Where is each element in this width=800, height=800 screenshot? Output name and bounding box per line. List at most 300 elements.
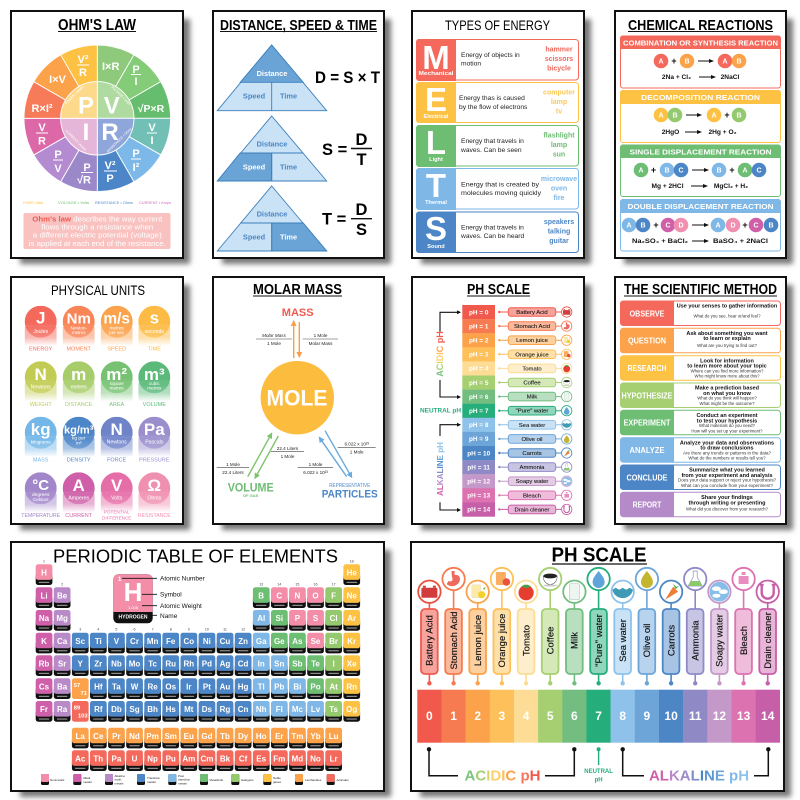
- elements: actinides: Bk: [220, 754, 231, 763]
- step: analyze: ANALYZE: [630, 445, 665, 455]
- elements: period 7: Bh: [147, 705, 158, 714]
- connectors, labels and icons: Sea water: [519, 423, 545, 429]
- row: light: Light: [429, 157, 443, 163]
- unit: potential difference: V: [111, 476, 123, 495]
- unit: moment: Newton-: [71, 326, 87, 330]
- item: drain cleaner: [756, 580, 779, 686]
- legend: element categories: Lanthanides: [305, 778, 322, 782]
- step: experiment: to test your hypothesis: [697, 418, 757, 424]
- elements: period 7: Ts: [329, 705, 339, 714]
- elements: lanthanides: Yb: [310, 732, 321, 741]
- step: experiment: EXPERIMENT: [624, 418, 671, 428]
- reaction: decomposition: A: [658, 112, 664, 120]
- elements: period 4: Ge: [274, 637, 285, 646]
- reaction: double displacement: DOUBLE DISPLACEMENT REACTION: [628, 204, 774, 211]
- connectors, labels and icons: Olive oil: [522, 437, 542, 443]
- elements: lanthanides: La: [76, 732, 85, 741]
- row: sound: Energy that travels in: [461, 224, 524, 232]
- pH column: pH = 8: [469, 422, 489, 429]
- step: hypothesize: on what you know: [703, 391, 752, 397]
- item: olive oil: [636, 568, 658, 686]
- item: stomach acid: Stomach Acid: [449, 611, 460, 670]
- row: light: [416, 124, 578, 167]
- reaction: decomposition: B: [736, 112, 742, 120]
- triangle: distance highlighted: [217, 45, 327, 111]
- elements: period 5: In: [258, 659, 265, 668]
- elements: actinides: Am: [182, 754, 195, 763]
- chart: formula wheel: R: [38, 136, 46, 148]
- connectors, labels and icons: Drain cleaner: [514, 507, 550, 513]
- elements: period 4: Ga: [256, 637, 267, 646]
- elements: period 6: At: [329, 682, 338, 691]
- elements: period 7: Nh: [256, 705, 267, 714]
- item: sea water: Sea water: [618, 619, 629, 662]
- elements: period 5: Zr: [94, 659, 102, 668]
- step: report: through writing or presenting: [688, 500, 766, 506]
- elements: period 5: Xe: [347, 659, 357, 668]
- unit: time: [138, 306, 170, 353]
- fraction: mole per particles: [298, 462, 333, 475]
- chart: formula wheel: VOLTAGE • Volts: [110, 85, 132, 106]
- elements: period 7: Hs: [166, 705, 176, 714]
- callout: definition: flows through a resistance when: [41, 222, 153, 232]
- fraction: mole per molar mass: 1 Mole: [314, 333, 328, 338]
- legend: element categories: transition: [178, 778, 191, 782]
- fraction: mole per molar mass: [303, 333, 338, 346]
- pH colour bar: 14: [761, 709, 775, 723]
- reaction: combination or synthesis: 2NaCl: [721, 74, 740, 81]
- bracket: alkaline pH: ALKALINE pH: [649, 768, 749, 784]
- row: mechanical: hammer: [545, 46, 573, 54]
- circle: mole: MOLE: [266, 386, 328, 410]
- chart: formula wheel: V: [54, 163, 62, 175]
- arrows: gas volume and mole: [248, 433, 278, 478]
- elements: period 5: Sn: [274, 659, 285, 668]
- reaction: single displacement: B: [716, 168, 722, 174]
- step: experiment: What materials do you need?: [699, 423, 756, 428]
- pH column: pH = 0: [469, 309, 489, 316]
- elements: period 4: Mn: [147, 637, 158, 646]
- elements: period 6: Tl: [258, 682, 265, 691]
- row: sound: [416, 210, 578, 253]
- elements: period 4: Br: [329, 637, 338, 646]
- step: conclude: Does your data support or reject your hypothesis?: [678, 478, 777, 483]
- pH column: pH = 10: [467, 450, 491, 457]
- elements: period 5: Sb: [292, 659, 303, 668]
- unit: weight: WEIGHT: [30, 402, 52, 408]
- reaction: single displacement: A: [742, 168, 748, 174]
- unit: pressure: Pascals: [145, 440, 164, 446]
- reaction: combination or synthesis: A: [658, 58, 664, 66]
- elements: period 5: Ru: [165, 659, 176, 668]
- reaction: combination or synthesis: A: [722, 58, 728, 66]
- unit: pressure: Pa: [144, 420, 165, 439]
- elements: period 2: Li: [40, 591, 48, 600]
- unit: force: [101, 417, 133, 464]
- legend: element categories: Alkaline: [114, 774, 125, 778]
- step: hypothesize: [620, 383, 780, 408]
- elements: period 2: Ne: [347, 591, 357, 600]
- elements: period 3: P: [295, 614, 301, 623]
- column numbers: 3: [79, 628, 81, 632]
- row: sound: speakers: [544, 219, 574, 226]
- elements: period 6: Hf: [94, 682, 103, 691]
- reaction: single displacement: B: [664, 168, 670, 174]
- row: electrical: tv: [556, 108, 562, 116]
- reaction: double displacement: D: [730, 222, 736, 230]
- reaction: single displacement: [620, 144, 781, 196]
- unit: time: s: [150, 308, 159, 328]
- elements: period 5: Y: [78, 659, 84, 668]
- elements: period 6: Cs: [39, 682, 50, 691]
- legend: VOLTAGE • Volts: [58, 201, 89, 205]
- reaction: double displacement: B: [768, 222, 774, 230]
- item: milk: Milk: [570, 632, 581, 649]
- unit: temperature: TEMPERATURE: [21, 513, 61, 519]
- elements: actinides: No: [310, 754, 321, 763]
- unit: moment: Nm: [67, 310, 91, 328]
- step: experiment: Conduct an experiment: [696, 413, 758, 419]
- step: research: to learn more about your topic: [687, 364, 767, 370]
- elements: period 6: 71: [80, 691, 88, 697]
- chart: formula wheel: R: [79, 67, 87, 79]
- fraction: mole per liters: [217, 462, 249, 475]
- heading: pH scale: PH SCALE: [552, 545, 646, 567]
- unit: resistance: RESISTANCE: [138, 513, 171, 519]
- pH colour bar: 6: [571, 709, 578, 723]
- unit: current: CURRENT: [65, 513, 93, 519]
- connectors, labels and icons: [498, 307, 572, 515]
- row: mechanical: [416, 39, 578, 81]
- legend: element categories: Post: [178, 774, 184, 778]
- reaction: double displacement: A: [715, 222, 721, 230]
- unit: speed: metres: [110, 326, 124, 330]
- elements: actinides: Pu: [166, 754, 176, 763]
- key: hydrogen sample cell: Name: [160, 613, 178, 620]
- bracket: acidic: ACIDIC pH: [435, 331, 445, 377]
- reaction: double displacement: B: [640, 222, 646, 230]
- row: mechanical: scissors: [545, 56, 573, 63]
- legend: element categories: metals: [114, 781, 124, 785]
- chart: formula wheel: I²: [133, 162, 140, 174]
- reaction: single displacement: MgCl₂ + H₂: [714, 183, 748, 190]
- triangle: speed highlighted: Speed: [243, 162, 266, 172]
- circle: mole: [261, 361, 334, 434]
- pH colour bar: 5: [547, 709, 554, 723]
- reaction: combination or synthesis: COMBINATION OR SYNTHESIS REACTION: [623, 40, 778, 48]
- unit: force: FORCE: [107, 458, 127, 464]
- arrows: mass and mole: [294, 321, 299, 358]
- key: hydrogen sample cell: 1: [118, 577, 122, 583]
- reaction: double displacement: BaSO₄ + 2NaCl: [713, 238, 768, 245]
- elements: period 4: [36, 633, 360, 653]
- unit: volume: [138, 361, 170, 408]
- chart: formula wheel: I×R: [102, 61, 119, 73]
- fraction: liters per mole: [271, 446, 304, 459]
- arrows: particles and mole: [319, 431, 352, 477]
- pH colour bar: 10: [664, 709, 678, 723]
- item: carrots: Carrots: [666, 625, 677, 656]
- step: analyze: [620, 437, 780, 462]
- chart: formula wheel: CURRENT • Amps: [64, 129, 87, 152]
- unit: resistance: Ω: [147, 476, 161, 495]
- elements: period 6: W: [131, 682, 139, 691]
- item: orange juice: Orange juice: [497, 614, 508, 667]
- heading: molar mass: MOLAR MASS: [253, 281, 342, 298]
- chart: formula wheel: [24, 45, 171, 192]
- unit: force: N: [111, 420, 123, 439]
- unit: potential difference: [101, 472, 133, 520]
- formula: time: T =: [322, 210, 346, 228]
- legend: element categories: Metalloids: [210, 778, 224, 782]
- reaction: decomposition: B: [672, 112, 678, 120]
- elements: period 5: Mo: [129, 659, 140, 668]
- elements: period 4: Ti: [95, 637, 102, 646]
- row: thermal: oven: [551, 186, 567, 192]
- column numbers: 6: [134, 628, 136, 632]
- row: sound: guitar: [549, 238, 569, 245]
- row: electrical: by the flow of electrons: [459, 104, 528, 111]
- elements: period 1: [36, 564, 360, 585]
- reaction: decomposition: DECOMPOSITION REACTION: [641, 95, 760, 102]
- item: lemon juice: Lemon juice: [473, 615, 484, 666]
- item: tomato: Tomato: [521, 625, 532, 656]
- connectors, labels and icons: Soapy water: [516, 479, 548, 485]
- callout: definition: is applied at each end of the resistance.: [29, 239, 166, 248]
- reaction: single displacement: C: [756, 168, 762, 174]
- pH colour bar: 13: [737, 709, 751, 723]
- chart: formula wheel: V²: [104, 160, 116, 172]
- elements: period 4: V: [114, 637, 120, 646]
- step: conclude: CONCLUDE: [626, 472, 668, 482]
- fraction: liters per mole: 1 Mole: [281, 454, 295, 459]
- elements: lanthanides: Er: [275, 732, 284, 741]
- triangle: time highlighted: Time: [280, 232, 297, 242]
- label: representative particles: REPRESENTATIVE: [329, 483, 371, 489]
- elements: period 1: He: [347, 568, 357, 577]
- step: hypothesize: What do you think will happen?: [697, 396, 757, 401]
- unit: density: DENSITY: [67, 458, 91, 464]
- elements: lanthanides: Ho: [256, 732, 267, 741]
- unit: distance: metres: [71, 384, 87, 390]
- unit: resistance: [138, 472, 171, 519]
- item: drain cleaner: Drain cleaner: [763, 612, 774, 669]
- elements: actinides: Th: [93, 754, 103, 763]
- unit: temperature: [21, 472, 61, 519]
- elements: period 7: 89: [74, 706, 81, 712]
- pH column: pH = 3: [469, 352, 489, 359]
- chart: formula wheel: V: [148, 122, 156, 134]
- step: question: What are you trying to find out?: [697, 343, 757, 348]
- step: analyze: Are there any trends or patterns in the data?: [683, 450, 772, 455]
- triangle: distance highlighted: Time: [280, 92, 297, 100]
- unit: time: seconds: [145, 329, 164, 335]
- elements: actinides: [72, 750, 342, 771]
- connectors, labels and icons: Tomato: [522, 366, 542, 372]
- chart: formula wheel: P: [83, 162, 91, 174]
- unit: density: m³: [76, 440, 82, 446]
- fraction: mole per particles: 6.022 x 10²³: [303, 470, 328, 475]
- formula: time: D: [356, 201, 368, 219]
- key: hydrogen sample cell: Symbol: [160, 592, 182, 599]
- unit: volume: metres: [147, 386, 162, 390]
- row: thermal: [416, 167, 578, 210]
- row: electrical: Energy thas is caused: [459, 95, 525, 102]
- unit: volume: VOLUME: [143, 402, 166, 408]
- label: neutral pH: pH: [595, 778, 603, 784]
- heading: physical units: PHYSICAL UNITS: [51, 283, 145, 298]
- item: pure water: "Pure" water: [594, 614, 605, 667]
- triangle: speed highlighted: [217, 116, 327, 181]
- unit: speed: SPEED: [107, 347, 126, 353]
- elements: period 2: O: [312, 591, 319, 600]
- triangle: time highlighted: Speed: [243, 232, 266, 242]
- unit: volume: cubic: [149, 381, 160, 386]
- pH colour bar: 7: [595, 709, 602, 723]
- chart: formula wheel: R×I²: [31, 103, 53, 115]
- elements: period 5: Tc: [148, 659, 158, 668]
- step: report: What did you discover from your research?: [686, 507, 769, 512]
- panel: Ohm's law: [11, 11, 183, 258]
- elements: period 7: Mc: [292, 705, 304, 714]
- item: soapy water: [708, 580, 731, 686]
- item: ammonia: [684, 568, 706, 686]
- unit: potential difference: Volts: [111, 496, 123, 502]
- unit: density: kg per: [72, 436, 86, 442]
- step: conclude: from your experiment and analysis: [681, 473, 773, 479]
- elements: period 5: Rb: [39, 659, 49, 668]
- elements: actinides: Pa: [112, 754, 122, 763]
- label: representative particles: [322, 483, 378, 500]
- elements: period 7: Rf: [94, 705, 103, 714]
- item: milk: [563, 580, 586, 686]
- panel: the scientific method: [615, 277, 786, 524]
- pH colour bar: 2: [474, 709, 481, 723]
- bracket: alkaline: [436, 425, 460, 510]
- elements: lanthanides: Eu: [184, 732, 194, 741]
- unit: resistance: Ohms: [147, 496, 162, 502]
- reaction: double displacement: A: [626, 222, 632, 230]
- key: hydrogen sample cell: HYDROGEN: [119, 615, 148, 621]
- item: orange juice: [491, 568, 513, 686]
- item: bleach: Bleach: [739, 626, 750, 655]
- fraction: mole per particles: 1 Mole: [309, 462, 323, 467]
- fraction: liters per mole: 22.4 Liters: [277, 446, 299, 451]
- fraction: particles per mole: [338, 442, 376, 454]
- unit: force: Newtons: [107, 440, 127, 446]
- item: pure water: [587, 568, 610, 686]
- chart: formula wheel: P: [132, 64, 140, 76]
- elements: period 6: Au: [220, 682, 230, 691]
- step: research: RESEARCH: [628, 363, 666, 373]
- heading: pH scale: PH SCALE: [467, 281, 530, 298]
- elements: period 2: [36, 587, 360, 608]
- elements: period 7: Sg: [129, 705, 140, 714]
- panel: chemical reactions: [615, 11, 786, 258]
- reaction: double displacement: Na₂SO₄ + BaCl₂: [632, 238, 688, 245]
- elements: period 4: Cu: [220, 637, 230, 646]
- unit: current: Amperes: [68, 496, 89, 502]
- elements: period 7: 103: [78, 714, 88, 720]
- row: light: Energy that travels in: [461, 138, 524, 145]
- row: electrical: lamp: [551, 99, 567, 106]
- chart: formula wheel: POWER • Watts: [64, 85, 85, 105]
- reaction: single displacement: C: [678, 168, 684, 174]
- elements: actinides: Np: [147, 754, 158, 763]
- column numbers: 5: [115, 628, 117, 632]
- elements: lanthanides: Gd: [201, 732, 213, 741]
- elements: period 3: Cl: [330, 614, 338, 623]
- elements: period 2: N: [295, 591, 301, 600]
- elements: period 2: F: [331, 591, 336, 600]
- legend: element categories: [41, 774, 349, 785]
- unit: volume: m³: [144, 365, 165, 384]
- fraction: particles per mole: 6.022 x 10²³: [344, 442, 369, 446]
- panel: vertical pH scale: [412, 277, 584, 524]
- unit: mass: kg: [31, 420, 51, 439]
- connectors, labels and icons: Battery Acid: [516, 310, 548, 316]
- row: electrical: E: [425, 81, 447, 118]
- key: hydrogen sample cell: Atomic Weight: [160, 603, 202, 610]
- elements: period 6: 57: [74, 683, 80, 689]
- elements: period 7: Lv: [311, 705, 321, 714]
- fraction: mole per molar mass: Molar Mass: [309, 341, 333, 346]
- bracket: acidic pH: ACIDIC pH: [465, 768, 540, 784]
- row: thermal: fire: [554, 195, 565, 202]
- item: carrots: [660, 580, 682, 686]
- unit: speed: [101, 306, 133, 353]
- chart: formula wheel: R: [101, 119, 119, 146]
- column numbers: 7: [152, 628, 154, 632]
- elements: period 4: Ca: [57, 637, 68, 646]
- elements: lanthanides: Lu: [329, 732, 339, 741]
- elements: period 6: Bi: [293, 682, 301, 691]
- reaction: single displacement: +: [729, 165, 735, 175]
- chart: formula wheel: I: [134, 76, 138, 88]
- pH column: pH = 6: [469, 394, 489, 401]
- elements: period 4: As: [292, 637, 303, 646]
- elements: period 7: Fr: [40, 705, 48, 714]
- step: question: Ask about something you want: [686, 331, 768, 337]
- panel: molar mass: [213, 277, 384, 524]
- pH column: pH = 12: [467, 478, 491, 486]
- elements: period 4: Zn: [238, 637, 248, 646]
- elements: period 3: Na: [39, 614, 50, 623]
- key: hydrogen sample cell: 1.008: [128, 605, 139, 610]
- reaction: double displacement: C: [753, 222, 759, 230]
- step: question: to learn or explain: [703, 336, 751, 342]
- item: lemon juice: [466, 580, 489, 686]
- chart: formula wheel: P: [132, 148, 140, 160]
- triangle: time highlighted: Distance: [257, 210, 287, 218]
- elements: lanthanides: Pm: [146, 732, 159, 741]
- step: report: Share your findings: [701, 495, 753, 501]
- chart: formula wheel: RESISTANCE • Ohms: [106, 127, 133, 154]
- column numbers: 10: [205, 628, 209, 632]
- elements: period 3: [36, 610, 360, 631]
- column numbers: 8: [170, 628, 172, 632]
- reaction: single displacement: Mg + 2HCl: [651, 183, 684, 190]
- legend: element categories: earth: [114, 778, 122, 782]
- step: observe: What do you see, hear or/and feel?: [693, 314, 761, 318]
- connectors, labels and icons: Milk: [527, 395, 537, 401]
- legend: RESISTANCE • Ohms: [95, 201, 133, 205]
- label: neutral pH: [584, 747, 613, 784]
- connectors, labels and icons: Orange juice: [515, 352, 549, 358]
- legend: POWER • Watts: [23, 201, 43, 205]
- pH colour bar: 3: [499, 709, 506, 723]
- step: conclude: What can you conclude from your experiment?: [681, 483, 774, 488]
